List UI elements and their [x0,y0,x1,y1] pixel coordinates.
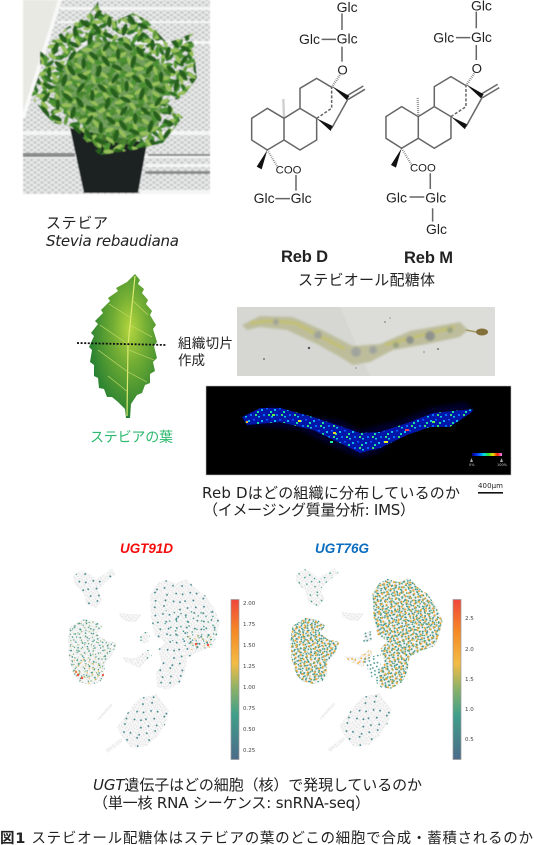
colour bar: UGT76G: 2.5 [465,616,474,622]
scale bar: 400 µm [478,482,503,494]
UMAP plot: UGT76G expression [290,568,442,752]
dotted section line [77,343,167,345]
chemical structure: Reb D [252,0,365,206]
title: UGT76G: UGT76G [315,541,369,556]
colour bar: UGT91D: 1.25 [243,664,256,670]
colour bar: UGT76G: 0.5 [465,737,474,743]
colour bar: UGT91D: 0.25 [243,748,256,754]
colour bar: UGT91D: 0.50 [243,727,256,733]
imaging mass spectrometry panel: 100% [497,463,508,467]
colour bar: UGT76G: 2.0 [465,647,474,653]
scale bar: 400 µm: 400µm [478,482,503,490]
text: Reb D tissue distribution: （イメージング質量分析: IMS） [203,501,415,519]
chemical structure: Reb D: COO [276,164,302,176]
chemical structure: Reb M: Glc [386,189,407,205]
heading: steviol glycosides: ステビオール配糖体 [298,271,435,289]
chemical structure: Reb M: Glc [433,29,454,45]
label: stevia leaf: ステビアの葉 [90,430,173,446]
label: tissue sectioning [178,336,233,369]
colour bar: UGT91D [231,600,256,760]
title: UGT91D: UGT91D [120,541,173,556]
colour bar: UGT91D: 1.50 [243,643,256,649]
chemical structure: Reb D: Glc [291,190,312,206]
colour bar: UGT76G: 1.0 [465,707,474,713]
text: Reb D tissue distribution [202,484,460,519]
UMAP plot: UGT91D expression [68,569,220,753]
chemical structure: Reb M: Glc [425,189,446,205]
text: UGT single-nucleus RNA-seq [93,776,422,812]
caption: stevia name: Stevia rebaudiana [46,232,179,250]
text: Reb D tissue distribution: Reb Dはどの組織に分布しているのか [202,484,460,502]
label: tissue sectioning: 組織切片 [178,336,233,352]
colour bar: UGT76G: 1.5 [465,677,474,683]
label: tissue sectioning: 作成 [178,353,205,369]
label: Reb M: Reb M [404,249,453,267]
text: UGT single-nucleus RNA-seq: UGT遺伝子はどの細胞（核）で発現しているのか [93,776,422,794]
chemical structure: Reb M: COO [410,163,436,175]
colour bar: UGT91D: 2.00 [243,601,256,607]
colour bar: UGT91D: 1.00 [243,685,256,691]
chemical structure: Reb D: Glc [299,31,320,47]
chemical structure: Reb M [386,0,499,237]
illustration: stevia leaf [89,274,157,418]
chemical structure: Reb M: O [472,61,482,76]
label: Reb D: Reb D [281,248,328,266]
photo: leaf tissue section [237,307,495,376]
text: UGT single-nucleus RNA-seq: （単一核 RNA シーケンス: snRNA-seq） [93,794,370,812]
chemical structure: Reb M: Glc [471,29,492,45]
photo: potted stevia plant [23,0,210,194]
imaging mass spectrometry panel: 0% [469,463,475,467]
chemical structure: Reb D: Glc [337,31,358,47]
colour bar: UGT76G [453,600,474,760]
chemical structure: Reb D: O [337,63,348,78]
chemical structure: Reb D: Glc [254,190,275,206]
imaging mass spectrometry panel [206,386,511,475]
colour bar: UGT91D: 1.75 [243,622,256,628]
caption: stevia name [46,214,179,250]
colour bar: UGT91D: 0.75 [243,706,256,712]
chemical structure: Reb M: Glc [426,221,447,237]
caption: stevia name: ステビア [46,214,108,232]
